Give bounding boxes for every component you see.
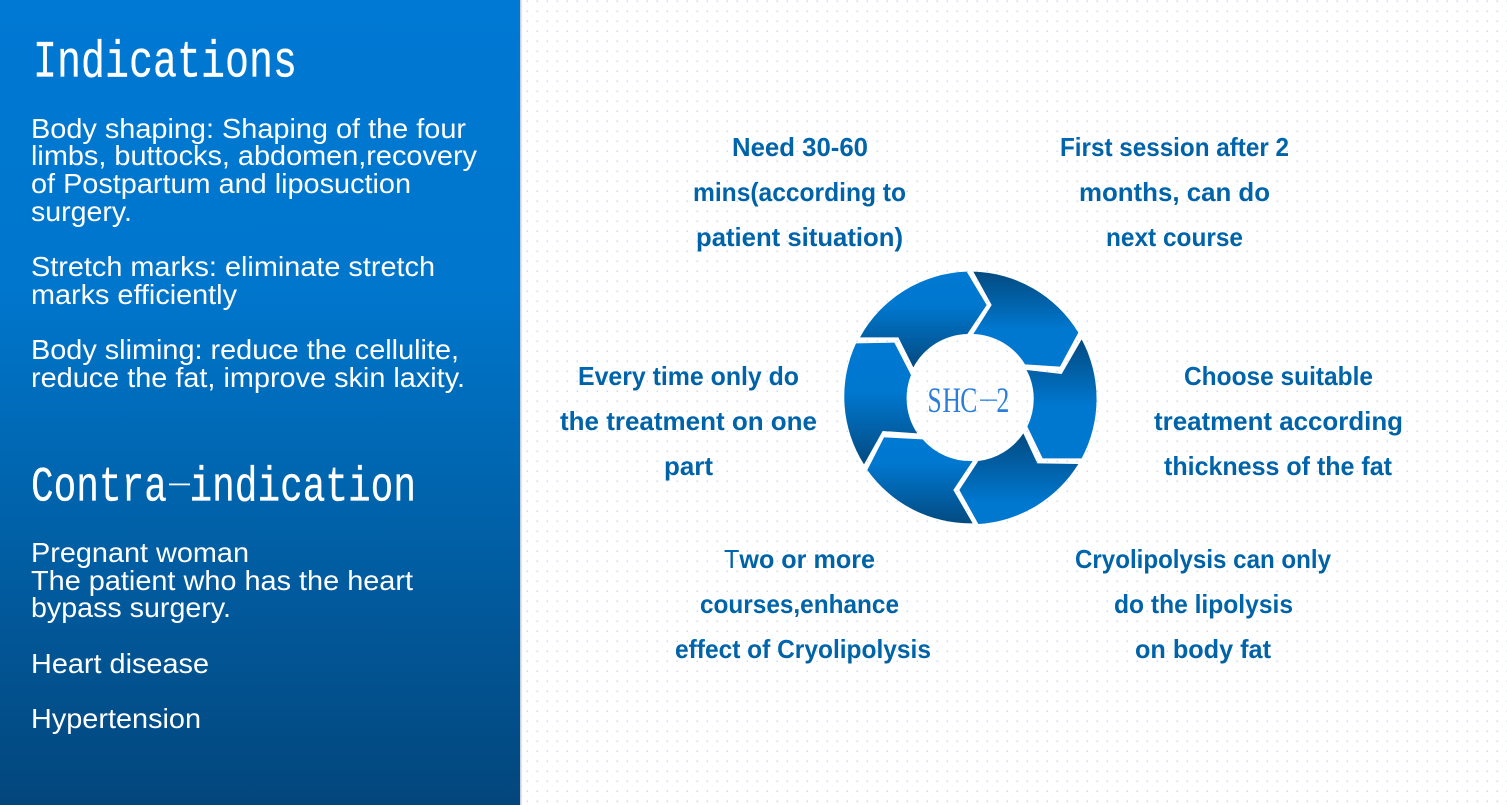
callout: next course timing <box>1060 132 1289 252</box>
callout: one part per treatment: Every time only do <box>578 361 799 391</box>
callout: choose treatment by fat thickness: Choose suitable <box>1184 361 1373 391</box>
text block: stretch marks: Stretch marks: eliminate stretch <box>31 251 435 282</box>
heading: Indications: Indications <box>33 34 297 92</box>
callout: next course timing: months, can do <box>1079 177 1270 207</box>
panel: indications and contra-indications <box>0 0 522 805</box>
text block: pregnant woman and bypass surgery: Pregnant woman <box>31 537 249 568</box>
callout: body fat only: do the lipolysis <box>1114 589 1293 619</box>
callout: next course timing: next course <box>1106 222 1243 252</box>
callout: choose treatment by fat thickness <box>1154 361 1403 481</box>
callout: multiple courses: effect of Cryolipolysis <box>675 634 931 664</box>
callout: choose treatment by fat thickness: thickness of the fat <box>1164 451 1392 481</box>
callout: one part per treatment: part <box>664 451 713 481</box>
callout: next course timing: First session after 2 <box>1060 132 1289 162</box>
arrow segment: top left <box>860 272 987 367</box>
callout: one part per treatment <box>560 361 817 481</box>
heading: Contra-indication: Contra-indication <box>31 460 416 516</box>
text block: pregnant woman and bypass surgery <box>31 537 413 623</box>
text block: body sliming: Body sliming: reduce the cellulite, <box>31 334 459 365</box>
callout: session duration: patient situation) <box>696 222 903 252</box>
text block: body shaping: of Postpartum and liposuction <box>31 168 411 199</box>
arrow segment: bottom left <box>867 437 973 523</box>
ring center label: SHC-2 <box>927 380 1009 420</box>
callout: session duration <box>693 132 906 252</box>
callout: multiple courses: courses,enhance <box>700 589 899 619</box>
text block: stretch marks: marks efficiently <box>31 279 237 310</box>
text block: stretch marks <box>31 251 435 310</box>
callout: multiple courses: Two or more <box>724 544 875 574</box>
text block: body shaping: Body shaping: Shaping of the four <box>31 113 466 144</box>
text block: body sliming: reduce the fat, improve skin laxity. <box>31 362 465 393</box>
text block: body shaping: surgery. <box>31 196 132 227</box>
dotted background <box>521 0 1507 805</box>
callout: one part per treatment: the treatment on one <box>560 406 817 436</box>
callout: choose treatment by fat thickness: treatment according <box>1154 406 1403 436</box>
callout: session duration: mins(according to <box>693 177 906 207</box>
arrow segment: right <box>1027 339 1097 458</box>
callout: body fat only <box>1075 544 1331 664</box>
callout: session duration: Need 30-60 <box>732 132 868 162</box>
text block: body shaping <box>31 113 477 227</box>
callout: body fat only: on body fat <box>1135 634 1271 664</box>
callout: multiple courses <box>675 544 931 664</box>
chart: circular arrow ring <box>844 272 1097 524</box>
text block: body sliming <box>31 334 465 393</box>
text block: heart disease: Heart disease <box>31 648 209 679</box>
text block: hypertension: Hypertension <box>31 703 201 734</box>
text block: body shaping: limbs, buttocks, abdomen,recovery <box>31 140 477 171</box>
arrow segment: top right <box>973 272 1078 367</box>
text block: pregnant woman and bypass surgery: bypass surgery. <box>31 592 231 623</box>
arrow segment: left <box>844 343 917 464</box>
text block: pregnant woman and bypass surgery: The patient who has the heart <box>31 565 413 596</box>
arrow segment: bottom right <box>959 433 1078 524</box>
callout: body fat only: Cryolipolysis can only <box>1075 544 1331 574</box>
